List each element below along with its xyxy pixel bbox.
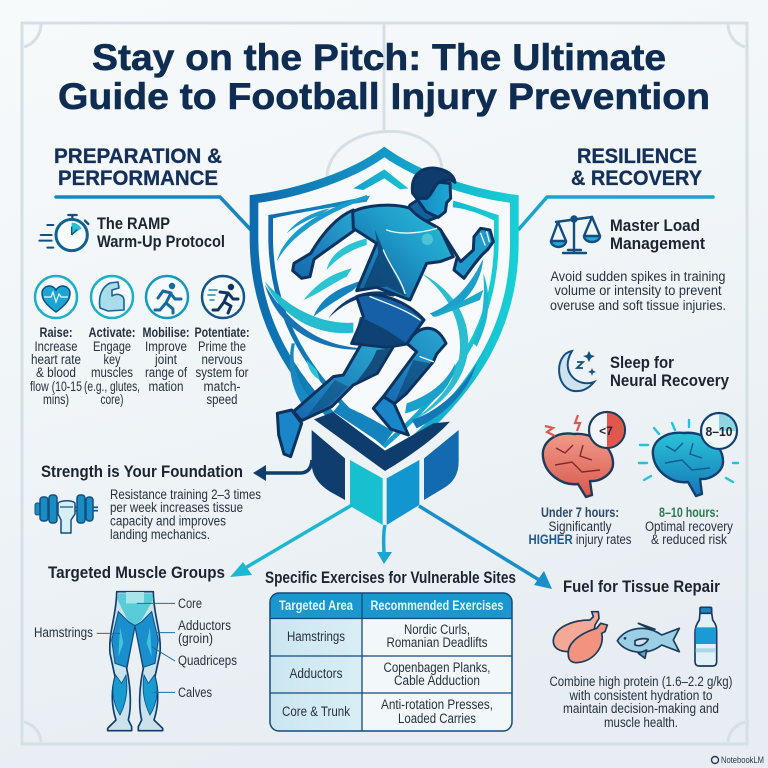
diagram: legs (97, 592, 175, 731)
body text: strength: capacity and improves (110, 514, 226, 528)
muscle labels: (groin) (178, 631, 213, 646)
icon: blue brain with 8-10 clock (639, 413, 738, 496)
column: activate: key (104, 352, 121, 367)
column: mobilise: Mobilise: (142, 325, 190, 340)
caption: 8-10 hours: 8–10 hours: (659, 505, 719, 520)
column: raise (30, 325, 82, 407)
heading: sleep: Neural Recovery (610, 371, 729, 390)
column: mobilise: range of (145, 365, 187, 380)
table: Copenbagen Planks, (384, 660, 490, 675)
central shield with runner (254, 152, 514, 471)
heading: strength: Strength is Your Foundation (41, 462, 243, 481)
body text: load: overuse and soft tissue injuries. (550, 298, 726, 313)
neck (406, 198, 437, 224)
front arm (441, 228, 493, 278)
shield pedestal (312, 430, 459, 525)
heading: load (610, 216, 705, 253)
runner highlights (370, 228, 489, 362)
arrow: to fuel (419, 506, 552, 589)
section heading: resilience and recovery (519, 145, 713, 229)
table: Romanian Deadlifts (386, 635, 488, 650)
column: potentiate (194, 325, 250, 407)
column: activate (84, 325, 140, 407)
heading: RAMP (97, 214, 225, 251)
arrow: to exercises table (377, 525, 392, 564)
caption: under 7 hours: HIGHER injury rates (528, 532, 632, 547)
panel: fuel for tissue repair (550, 577, 732, 730)
caption: 8-10 hours (645, 505, 733, 547)
body text: fuel: maintain decision-making and (563, 701, 719, 716)
icon: scales (551, 216, 600, 253)
panel: RAMP warm-up (30, 214, 250, 407)
body text: load (550, 269, 726, 313)
column: activate: core) (100, 392, 124, 407)
front leg (383, 328, 446, 404)
body text: strength (110, 487, 261, 542)
body text: fuel: Combine high protein (1.6–2.2 g/kg) (550, 674, 732, 689)
icon: dumbbell with fist (35, 495, 98, 533)
table: Recommended Exercises (370, 598, 504, 613)
heading: load: Management (610, 234, 705, 253)
column: raise: mins) (43, 392, 69, 407)
bottom dark chevron (314, 412, 450, 471)
column: potentiate: Prime the (198, 339, 246, 354)
column: raise: heart rate (31, 352, 81, 367)
column: mobilise (142, 325, 190, 394)
section heading: preparation and performance: PREPARATION & (54, 145, 222, 168)
body text: load: Avoid sudden spikes in training (550, 269, 726, 284)
shorts (352, 294, 424, 347)
title: Stay on the Pitch: The Ultimate (92, 37, 666, 78)
muscle labels: Core (178, 596, 202, 611)
body text: fuel (550, 674, 732, 730)
icon: heart (35, 276, 77, 318)
column: mobilise: Improve (145, 339, 187, 354)
column: potentiate: nervous (202, 352, 243, 367)
column: potentiate: match- (204, 379, 240, 394)
column: mobilise: mation (148, 379, 184, 394)
table: Hamstrings (287, 629, 345, 644)
heading: RAMP: The RAMP (97, 214, 170, 233)
column: raise: flow (10-15 (30, 379, 82, 394)
heading: fuel: Fuel for Tissue Repair (563, 577, 720, 596)
body text: strength: per week increases tissue (110, 500, 243, 515)
panel: targeted muscle groups (34, 563, 237, 731)
front boot (373, 397, 408, 435)
icon: red brain with under 7 clock: <7 (599, 424, 613, 438)
caption: 8-10 hours: & reduced risk (651, 532, 727, 547)
panel: strength (35, 462, 261, 542)
icon: potentiate sprinter (202, 276, 244, 318)
column: activate: (e.g., glutes, (84, 379, 140, 394)
table: Anti-rotation Presses, (381, 697, 493, 712)
icon: flexed arm (91, 276, 133, 318)
panel: specific exercises (265, 568, 516, 731)
section heading: preparation and performance: PERFORMANCE (58, 167, 218, 190)
arrow: to muscle groups (230, 505, 352, 577)
section heading: resilience and recovery: & RECOVERY (571, 167, 702, 190)
icon: mobilise runner (146, 276, 188, 318)
body text: strength: landing mechanics. (110, 527, 210, 542)
back arm (293, 210, 358, 278)
heading: muscle groups: Targeted Muscle Groups (48, 563, 225, 582)
body text: strength: Resistance training 2–3 times (110, 487, 261, 502)
swirls inside shield (277, 195, 488, 445)
column: raise: & blood (36, 365, 76, 380)
column: activate: Engage (93, 339, 131, 354)
column: mobilise: joint (154, 352, 177, 367)
table: Core & Trunk (282, 704, 350, 719)
shield outline (254, 152, 514, 465)
column: potentiate: Potentiate: (194, 325, 250, 340)
caption: under 7 hours: Under 7 hours: (541, 505, 619, 520)
table: Nordic Curls, (404, 622, 470, 637)
body text: fuel: with consistent hydration to (569, 688, 712, 703)
heading: load: Master Load (610, 216, 700, 235)
column: raise: Raise: (40, 325, 72, 340)
muscle labels (34, 596, 237, 700)
hair (412, 168, 455, 198)
icon: moon and stars (559, 351, 596, 391)
column: activate: muscles (91, 365, 133, 380)
table: Loaded Carries (398, 711, 476, 726)
heading: exercises: Specific Exercises for Vulnerable Sites (265, 568, 516, 587)
column: activate: Activate: (88, 325, 136, 340)
runner shading (307, 230, 430, 417)
column: potentiate: speed (206, 392, 238, 407)
section heading: preparation and performance (54, 145, 251, 230)
icon: stopwatch (39, 215, 88, 251)
body text: load: volume or intensity to prevent (554, 283, 722, 298)
icon: water bottle (695, 607, 717, 666)
muscle labels: Quadriceps (178, 653, 237, 668)
title: Guide to Football Injury Prevention (58, 76, 710, 117)
muscle labels: Adductors (178, 618, 231, 633)
heading: RAMP: Warm-Up Protocol (97, 232, 225, 251)
icon: blue brain with 8-10 clock: 8–10 (706, 424, 732, 439)
muscle labels: Calves (178, 685, 212, 700)
ribbon (265, 282, 483, 350)
caption: 8-10 hours: Optimal recovery (645, 519, 733, 534)
column: raise: Increase (34, 339, 78, 354)
table: Cable Adduction (394, 673, 480, 688)
arrow: to strength (253, 460, 312, 481)
icon: fish (617, 623, 679, 658)
heading: sleep (610, 353, 729, 390)
icon: chicken (553, 612, 607, 663)
table: Adductors (290, 666, 343, 681)
caption: under 7 hours (528, 505, 632, 547)
torso (353, 205, 453, 300)
panel: sleep (528, 351, 738, 547)
caption: under 7 hours: Significantly (548, 519, 612, 534)
section heading: resilience and recovery: RESILIENCE (577, 145, 697, 168)
runner figure (277, 168, 493, 457)
back boot (277, 410, 302, 457)
body text: fuel: muscle health. (604, 715, 678, 730)
title (58, 37, 710, 117)
table: Targeted Area (279, 598, 353, 613)
back leg (293, 343, 393, 421)
head (417, 180, 451, 217)
column: potentiate: system for (196, 365, 249, 380)
table (270, 593, 512, 731)
icon: red brain with under 7 clock (543, 412, 625, 497)
muscle labels: Hamstrings (34, 625, 93, 640)
heading: sleep: Sleep for (610, 353, 674, 372)
panel: master load management (550, 216, 726, 313)
